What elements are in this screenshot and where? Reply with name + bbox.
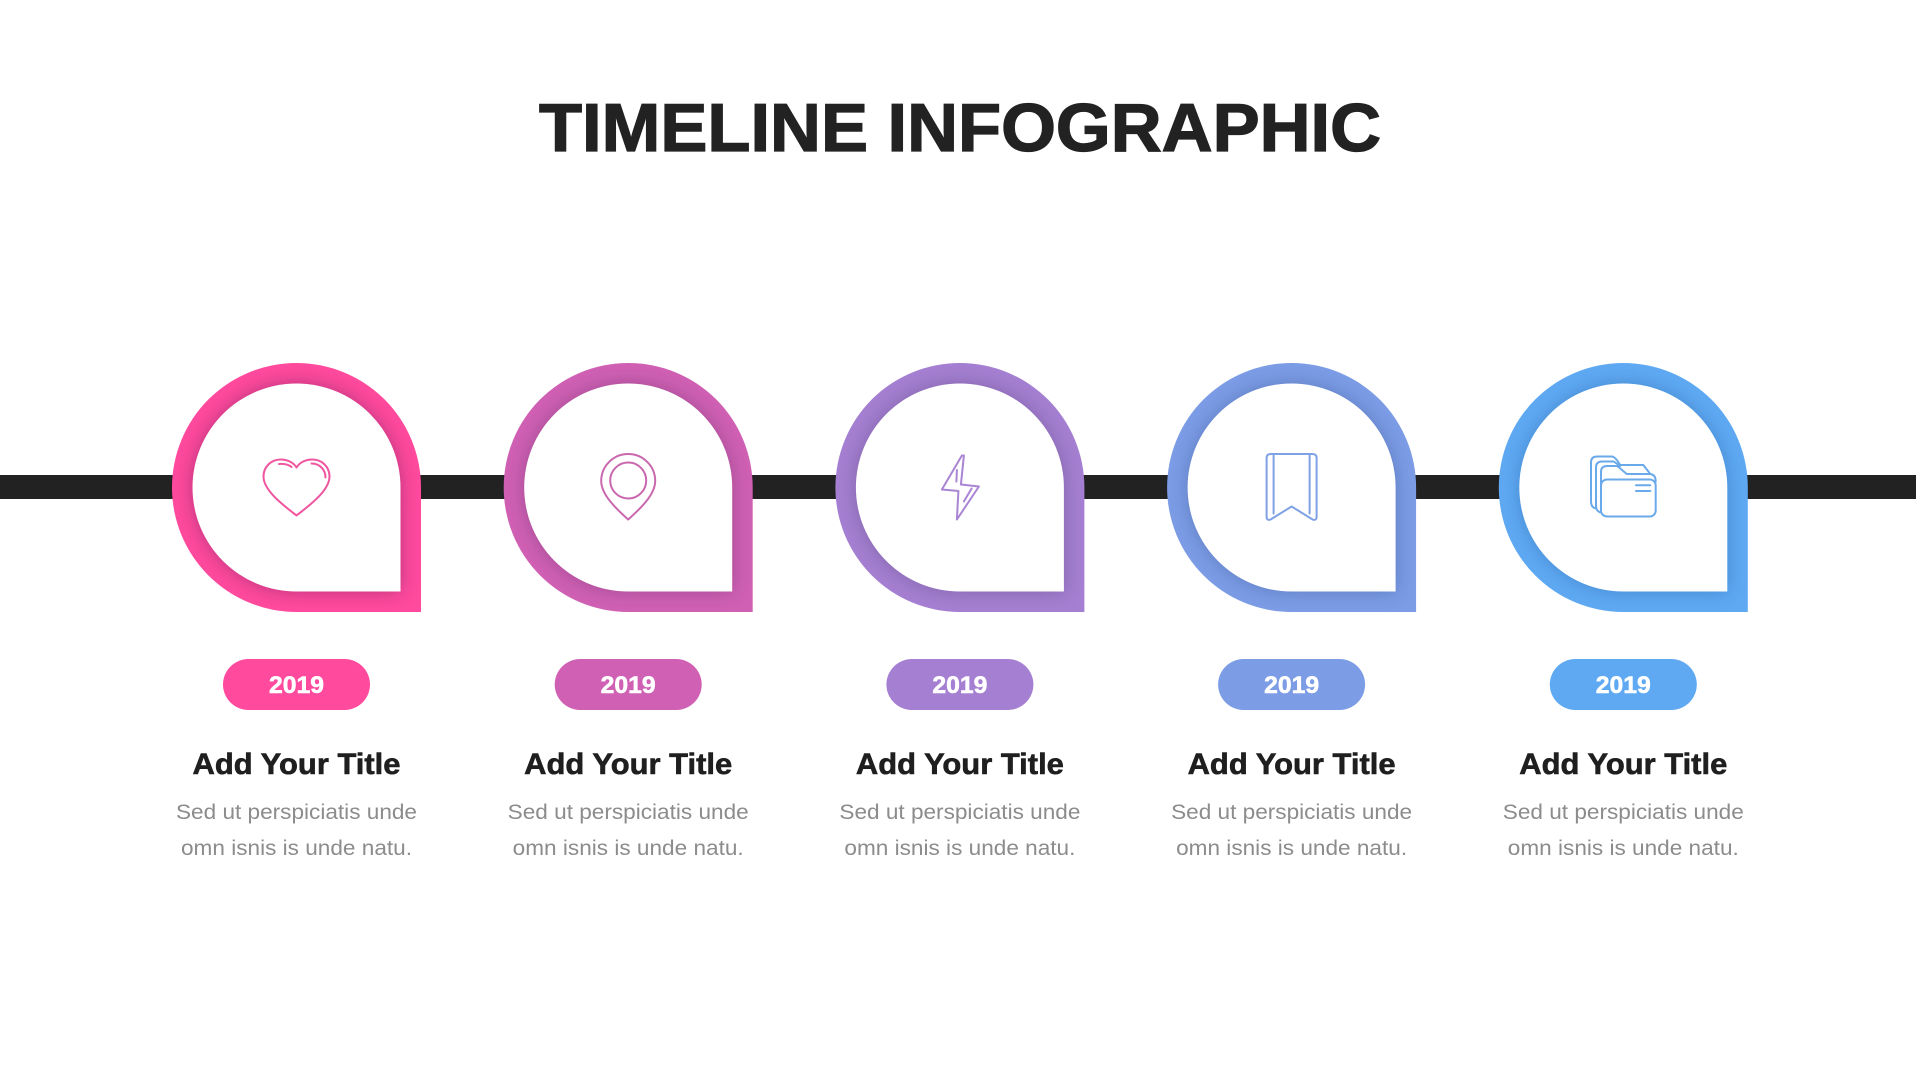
marker: magenta drop with pin icon <box>504 363 753 612</box>
year pill: 2019 <box>932 672 987 699</box>
year pill: 2019 <box>1596 672 1651 699</box>
icon: map pin <box>601 454 655 520</box>
step 3: energy <box>835 363 1084 860</box>
year pill: 2019 <box>269 672 324 699</box>
step title: Add Your Title <box>192 748 400 781</box>
icon: heart <box>264 460 330 516</box>
step 1: heart <box>172 363 421 860</box>
marker: pink drop with heart icon <box>172 363 421 612</box>
marker: periwinkle drop with bookmark icon <box>1167 363 1416 612</box>
step title: Add Your Title <box>1519 748 1727 781</box>
step description <box>839 800 1080 860</box>
step description <box>508 800 749 860</box>
step description: Sed ut perspiciatis unde <box>508 800 749 824</box>
year pill <box>886 659 1033 710</box>
step title: Add Your Title <box>1188 748 1396 781</box>
step description <box>1171 800 1412 860</box>
icon: lightning bolt <box>942 456 979 520</box>
icon: bookmark <box>1267 454 1317 520</box>
marker: blue drop with folder icon <box>1499 363 1748 612</box>
step description: omn isnis is unde natu. <box>513 836 744 860</box>
timeline bar <box>0 475 1916 499</box>
year pill: 2019 <box>1264 672 1319 699</box>
step description: Sed ut perspiciatis unde <box>839 800 1080 824</box>
step description <box>176 800 417 860</box>
icon: folders <box>1591 456 1656 516</box>
step title: Add Your Title <box>856 748 1064 781</box>
step title: Add Your Title <box>524 748 732 781</box>
step description: omn isnis is unde natu. <box>181 836 412 860</box>
step description <box>1503 800 1744 860</box>
year pill <box>223 659 370 710</box>
year pill: 2019 <box>601 672 656 699</box>
step 2: location <box>504 363 753 860</box>
step 5: folders <box>1499 363 1748 860</box>
step description: Sed ut perspiciatis unde <box>176 800 417 824</box>
step description: omn isnis is unde natu. <box>1176 836 1407 860</box>
step description: omn isnis is unde natu. <box>844 836 1075 860</box>
step description: Sed ut perspiciatis unde <box>1503 800 1744 824</box>
step description: omn isnis is unde natu. <box>1508 836 1739 860</box>
year pill <box>1550 659 1697 710</box>
year pill <box>555 659 702 710</box>
year pill <box>1218 659 1365 710</box>
step 4: bookmark <box>1167 363 1416 860</box>
step description: Sed ut perspiciatis unde <box>1171 800 1412 824</box>
marker: purple drop with bolt icon <box>835 363 1084 612</box>
title: TIMELINE INFOGRAPHIC <box>539 90 1381 166</box>
